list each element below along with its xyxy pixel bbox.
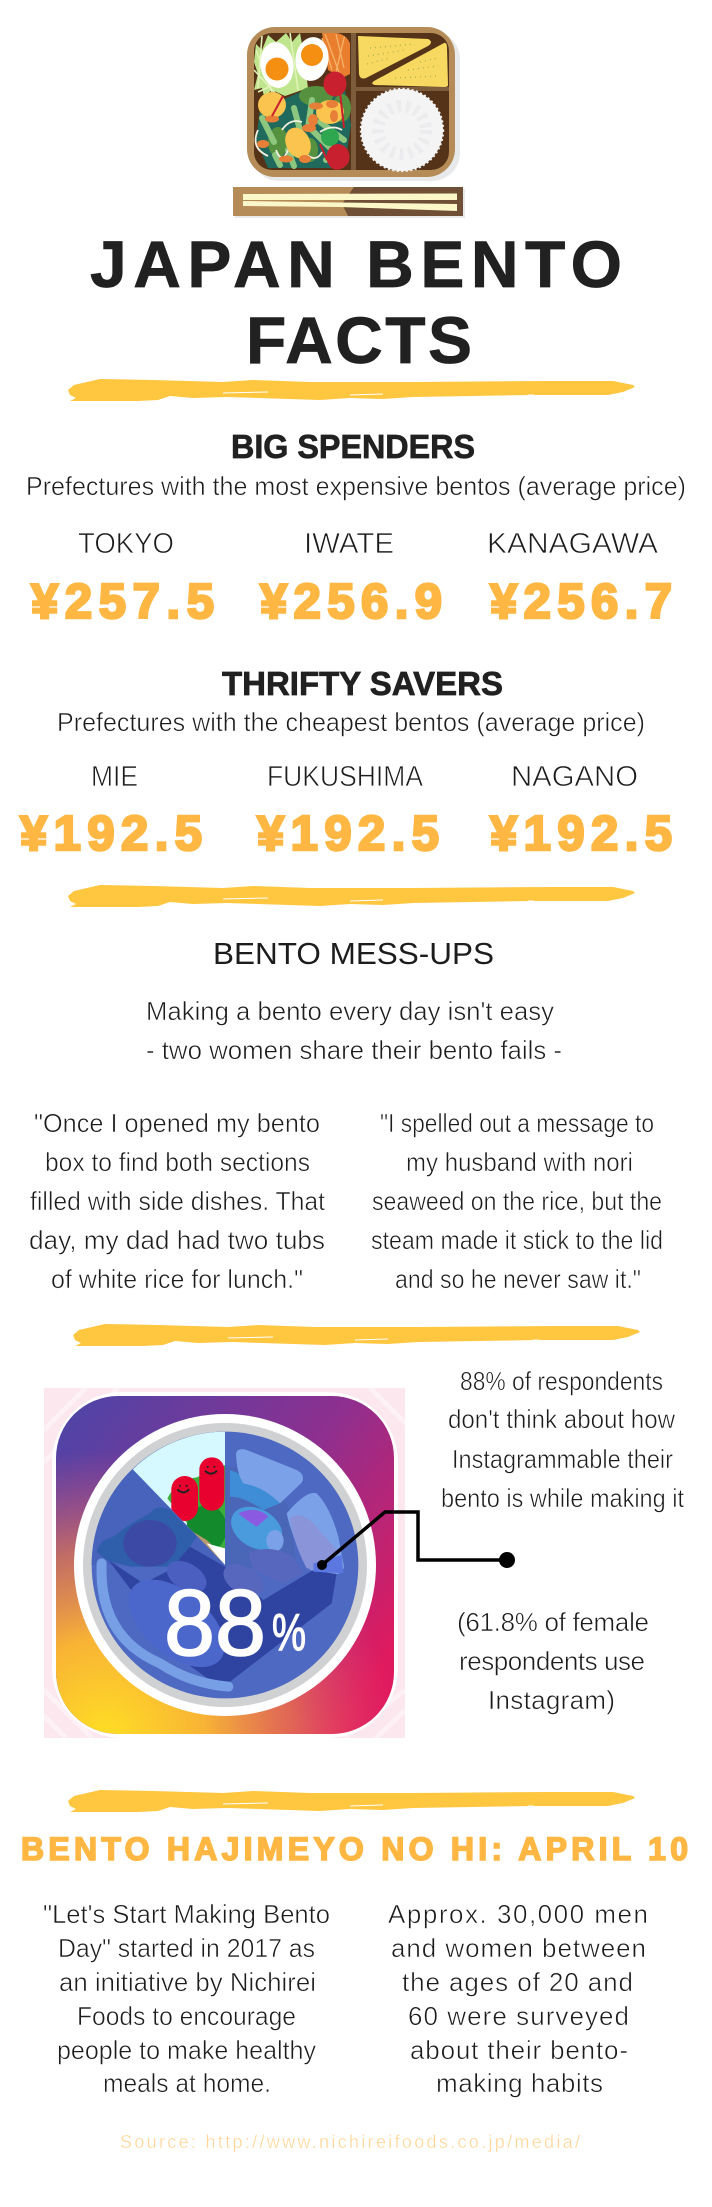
intro text xyxy=(146,996,562,1065)
brush divider 2 xyxy=(68,885,635,907)
text: left paragraph: Foods to encourage xyxy=(77,2001,296,2031)
quote: left: box to find both sections xyxy=(45,1147,310,1177)
eggs xyxy=(260,42,294,88)
column: Nagano: NAGANO xyxy=(511,761,638,793)
panel: bento mess-ups xyxy=(29,936,663,1294)
bento tray xyxy=(247,27,460,181)
quote: left: day, my dad had two tubs xyxy=(29,1225,325,1255)
column: Tokyo xyxy=(31,528,214,629)
column: Tokyo: ¥257.5 xyxy=(31,575,214,629)
subtitle: most expensive: Prefectures with the most expensive bentos (average price) xyxy=(26,471,686,501)
column: Kanagawa: KANAGAWA xyxy=(487,528,658,560)
column: Iwate xyxy=(260,528,442,629)
text: right paragraph: Approx. 30,000 men xyxy=(388,1899,648,1929)
vegetables xyxy=(254,33,351,170)
text: 88% of respondents: 88% of respondents xyxy=(460,1366,663,1396)
quote: left xyxy=(29,1108,326,1294)
quote: right: steam made it stick to the lid xyxy=(371,1225,663,1255)
text: right paragraph: and women between xyxy=(391,1933,646,1963)
text: right paragraph: 60 were surveyed xyxy=(408,2001,629,2031)
intro text: - two women share their bento fails - xyxy=(146,1035,562,1065)
text: right paragraph: about their bento- xyxy=(410,2035,628,2065)
text: left paragraph: people to make healthy xyxy=(57,2035,316,2065)
title xyxy=(90,227,622,377)
text: 61.8% of female respondents: respondents use xyxy=(459,1646,645,1676)
icon: bento box with chopsticks xyxy=(233,27,465,218)
quote: left: filled with side dishes. That xyxy=(30,1186,326,1216)
heading: thrifty savers: THRIFTY SAVERS xyxy=(222,665,503,702)
omelette slices xyxy=(358,36,448,87)
heading: big spenders: BIG SPENDERS xyxy=(231,428,475,465)
column: Fukushima: ¥192.5 xyxy=(257,807,439,861)
text: left paragraph: meals at home. xyxy=(103,2068,271,2098)
column: Fukushima xyxy=(257,761,439,861)
column: Iwate: IWATE xyxy=(304,528,394,560)
label: 88%: 88 xyxy=(164,1570,266,1675)
quote: right: "I spelled out a message to xyxy=(380,1108,654,1138)
tomatoes xyxy=(324,72,346,96)
text: 88% of respondents: Instagrammable their xyxy=(452,1444,673,1474)
column: Nagano xyxy=(490,761,672,861)
text: right paragraph: making habits xyxy=(436,2068,603,2098)
brush divider 1 xyxy=(68,379,635,401)
text: 88% of respondents: don't think about how xyxy=(448,1404,675,1434)
subtitle: cheapest: Prefectures with the cheapest bentos (average price) xyxy=(57,707,645,737)
panel: thrifty savers xyxy=(20,665,672,861)
text: left paragraph: Day" started in 2017 as xyxy=(58,1933,315,1963)
column: Mie: ¥192.5 xyxy=(20,807,202,861)
heading: bento mess-ups: BENTO MESS-UPS xyxy=(213,936,494,971)
quote: right xyxy=(371,1108,663,1294)
text: 88% of respondents: bento is while making it xyxy=(441,1483,685,1513)
brush divider 3 xyxy=(73,1324,640,1346)
column: Kanagawa xyxy=(487,528,672,629)
panel: bento hajimeyo no hi xyxy=(21,1831,688,2098)
column: Mie: MIE xyxy=(91,761,138,793)
chopstick mat xyxy=(233,187,465,218)
text: right paragraph xyxy=(388,1899,648,2098)
quote: right: seaweed on the rice, but the xyxy=(372,1186,662,1216)
heading: bento hajimeyo no hi: BENTO HAJIMEYO NO HI: APRIL 10 xyxy=(21,1831,688,1867)
quote: left: of white rice for lunch." xyxy=(51,1264,303,1294)
dimmed bento in pie xyxy=(87,1449,344,1687)
text: 61.8% of female respondents: Instagram) xyxy=(488,1685,615,1715)
column: Iwate: ¥256.9 xyxy=(260,575,442,629)
text: 61.8% of female respondents xyxy=(457,1607,649,1715)
text: 88% of respondents xyxy=(441,1366,685,1513)
column: Kanagawa: ¥256.7 xyxy=(490,575,672,629)
column: Tokyo: TOKYO xyxy=(78,528,174,560)
title: FACTS xyxy=(246,303,472,377)
panel: big spenders xyxy=(26,428,686,629)
quote: right: and so he never saw it." xyxy=(395,1264,641,1294)
text: right paragraph: the ages of 20 and xyxy=(402,1967,633,1997)
column: Fukushima: FUKUSHIMA xyxy=(267,761,423,793)
text: left paragraph xyxy=(43,1899,330,2098)
text: left paragraph: "Let's Start Making Bento xyxy=(43,1899,330,1929)
callout line xyxy=(317,1512,515,1570)
icon: instagram pie chart 88 percent xyxy=(44,1388,405,1738)
rice xyxy=(361,89,443,171)
pie slice with food xyxy=(133,1432,227,1567)
column: Mie xyxy=(20,761,202,861)
source line: Source: http://www.nichireifoods.co.jp/media/ xyxy=(120,2132,580,2152)
quote: right: my husband with nori xyxy=(406,1147,633,1177)
brush divider 4 xyxy=(68,1790,635,1812)
text: left paragraph: an initiative by Nichirei xyxy=(59,1967,316,1997)
text: 61.8% of female respondents: (61.8% of female xyxy=(457,1607,649,1637)
quote: left: "Once I opened my bento xyxy=(34,1108,320,1138)
column: Nagano: ¥192.5 xyxy=(490,807,672,861)
intro text: Making a bento every day isn't easy xyxy=(146,996,554,1026)
title: JAPAN BENTO xyxy=(90,227,622,301)
label: 88%: % xyxy=(272,1604,306,1662)
